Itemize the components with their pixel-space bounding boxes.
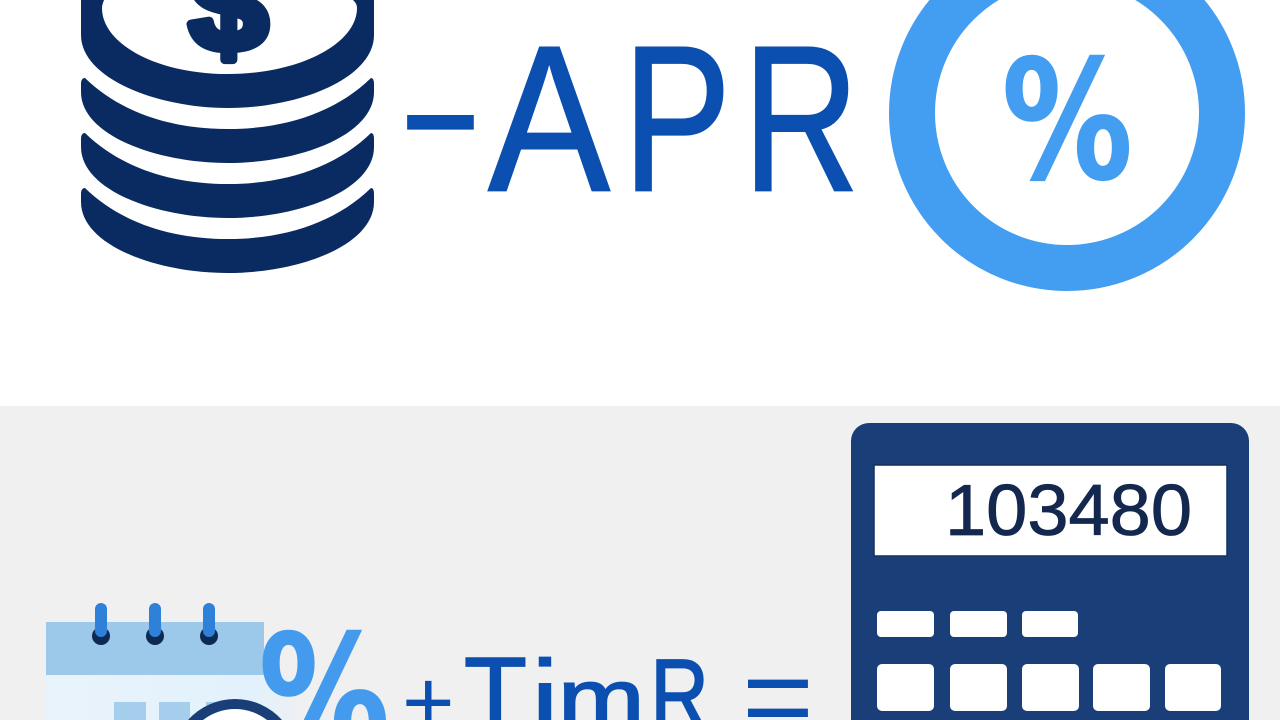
text: TimR: [464, 636, 709, 720]
icon: calendar with clock: [46, 603, 306, 720]
percent glyph: %: [1002, 26, 1133, 218]
icon: percent ring: [912, 0, 1222, 268]
calculator display: [874, 465, 1227, 556]
panel: bottom grey section: [0, 406, 1280, 720]
panel: top white section: [0, 0, 1280, 406]
minus sign: -: [395, 3, 486, 212]
icon: calculator: [851, 423, 1249, 720]
calculator display: 103480: [945, 471, 1192, 551]
calculator buttons: [877, 611, 1221, 711]
heading: APR: P: [623, 4, 731, 236]
heading: APR: R: [742, 4, 860, 236]
heading: APR: A: [488, 4, 610, 236]
icon: coin stack with dollar sign: [81, 0, 374, 273]
